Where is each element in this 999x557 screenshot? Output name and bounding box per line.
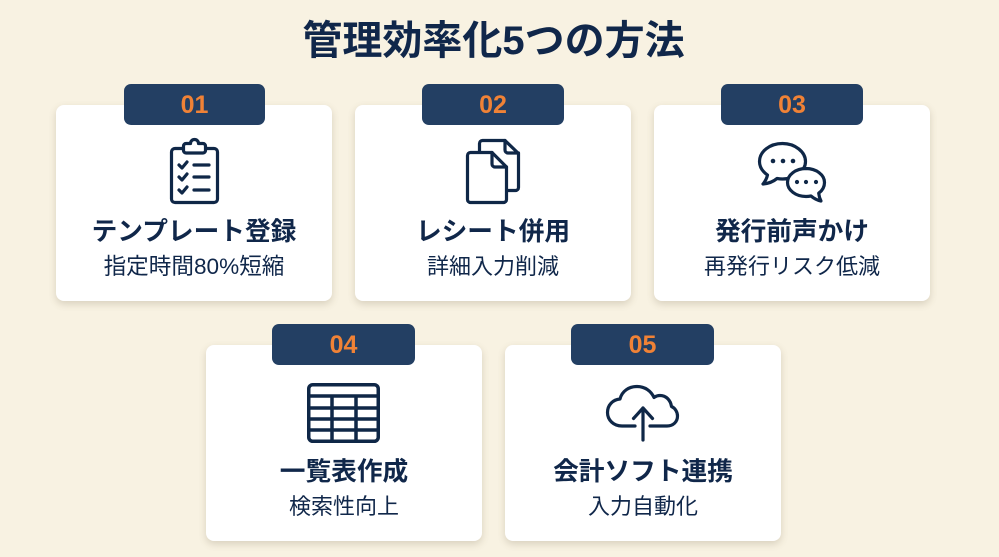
panel: 04 list creation [206,345,482,541]
panel: 05 accounting software integration [505,345,781,541]
number badge 01: 01 [181,91,208,119]
icon: documents [466,138,520,204]
subtext: 詳細入力削減 [427,254,559,279]
subtext: 指定時間80%短縮 [104,254,284,279]
heading: 一覧表作成 [280,458,408,486]
title: 管理効率化5つの方法 [302,19,685,63]
heading: 会計ソフト連携 [553,458,733,486]
panel: 02 receipt combined use [355,105,631,301]
subtext: 入力自動化 [588,494,698,519]
heading: レシート併用 [416,218,570,246]
heading: テンプレート登録 [92,218,296,246]
subtext: 再発行リスク低減 [704,254,880,279]
number badge 04 [272,324,415,365]
icon: cloud upload [606,384,680,442]
number badge 04: 04 [330,331,357,359]
number badge 02 [422,84,564,125]
panel: 01 template registration [56,105,332,301]
number badge 05: 05 [629,331,656,359]
subtext: 検索性向上 [289,494,399,519]
icon: speech bubbles [758,142,826,203]
panel: 03 verbal reminder before issuing [654,105,930,301]
number badge 03: 03 [778,91,806,119]
number badge 03 [721,84,863,125]
icon: clipboard checklist [170,138,220,204]
number badge 01 [124,84,265,125]
number badge 05 [571,324,714,365]
number badge 02: 02 [479,91,507,119]
heading: 発行前声かけ [715,218,869,246]
icon: table [307,383,380,443]
